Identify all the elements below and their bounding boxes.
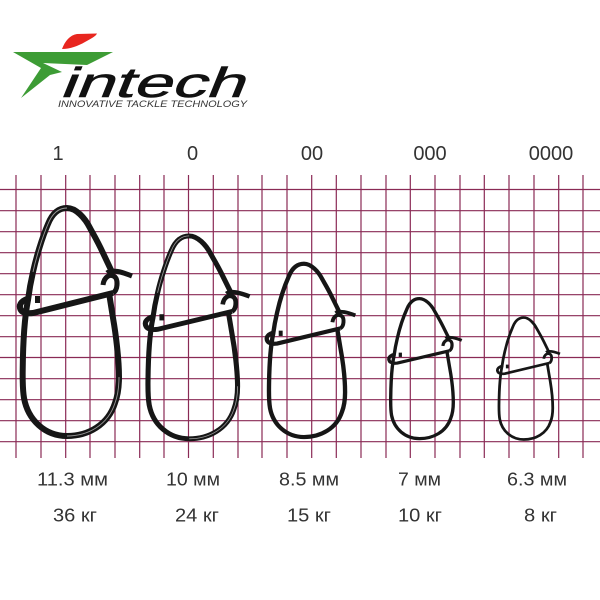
diameter labels row: 10 мм xyxy=(166,468,220,490)
logo: green star xyxy=(13,52,113,98)
snap 00 xyxy=(267,264,355,437)
diameter labels row xyxy=(37,468,567,490)
logo: red swoosh xyxy=(62,34,97,49)
logo: wordmark: intech xyxy=(55,60,258,107)
load labels row: 8 кг xyxy=(524,504,557,526)
snap 0000 xyxy=(497,318,560,440)
load labels row: 15 кг xyxy=(287,504,331,526)
diameter labels row: 11.3 мм xyxy=(37,468,108,490)
load labels row: 24 кг xyxy=(175,504,219,526)
logo: tagline: INNOVATIVE TACKLE TECHNOLOGY xyxy=(58,99,248,110)
size labels row: 0000 xyxy=(529,143,573,165)
load labels row xyxy=(53,504,557,526)
diameter labels row: 8.5 мм xyxy=(279,468,339,490)
load labels row: 10 кг xyxy=(398,504,442,526)
size labels row: 1 xyxy=(52,143,64,165)
snap 000 xyxy=(389,299,462,439)
load labels row: 36 кг xyxy=(53,504,97,526)
diameter labels row: 6.3 мм xyxy=(507,468,567,490)
size labels row xyxy=(52,143,573,165)
size labels row: 00 xyxy=(301,143,323,165)
size labels row: 000 xyxy=(413,143,447,165)
snap 0 xyxy=(145,236,250,439)
logo: Intech xyxy=(13,34,258,110)
diameter labels row: 7 мм xyxy=(398,468,441,490)
snap 1 xyxy=(20,208,132,436)
size labels row: 0 xyxy=(187,143,198,165)
